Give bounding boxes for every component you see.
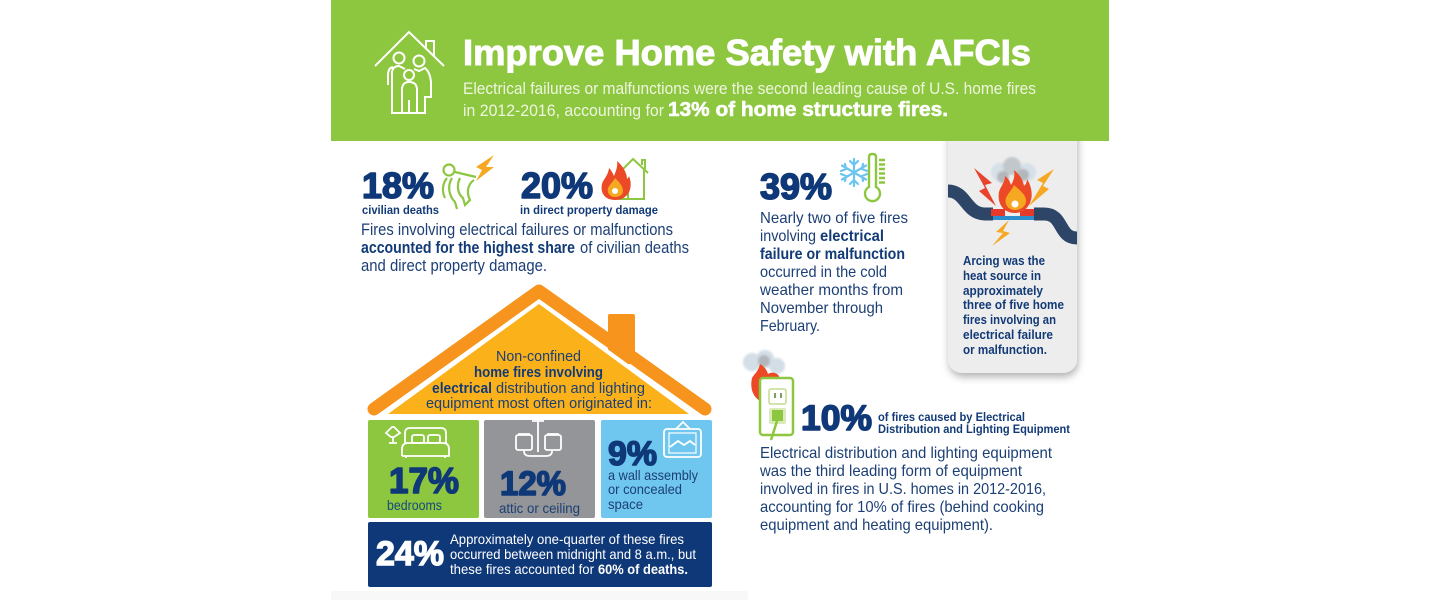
subtitle [463,79,1036,121]
title: Improve Home Safety with AFCIs [463,32,1031,73]
text: highest share paragraph: and direct property damage. [361,257,547,275]
room: wall assembly: space [608,496,643,512]
stat: 10% of fires: of fires caused by Electrical [878,410,1025,424]
roof text: electrical [432,381,492,397]
icon: burning outlet [743,350,793,440]
subtitle: in 2012-2016, accounting for [463,101,664,120]
stat: 20% property damage: 20% [521,165,593,206]
subtitle: Electrical failures or malfunctions were the second leading cause of U.S. home fires [463,79,1036,98]
text: cold weather paragraph [759,210,908,335]
illustration: arcing wire [948,157,1077,246]
text: cold weather paragraph: occurred in the cold [760,264,887,281]
roof text: home fires involving [474,365,603,381]
text: equipment paragraph: involved in fires in U.S. homes in 2012-2016, [760,481,1046,498]
roof text: equipment most often originated in: [426,396,652,412]
text: equipment paragraph: was the third leading form of equipment [759,463,1023,480]
room: bedrooms [368,420,479,518]
text: cold weather paragraph: failure or malfunction [760,246,905,263]
card text: heat source in [963,269,1041,283]
text: highest share paragraph: of civilian deaths [580,239,689,257]
panel: header banner [331,0,1109,141]
room: attic or ceiling [484,420,595,518]
stat: 20% property damage: in direct property damage [520,203,658,217]
room: wall assembly: or concealed [608,481,682,497]
room: wall assembly [601,420,712,518]
text: cold weather paragraph: Nearly two of five fires [760,210,908,227]
stat: 20% property damage [520,159,658,217]
icon: house on fire [602,159,648,200]
icon: bed and lamp [386,427,449,458]
stat: 10% of fires: Distribution and Lighting Equipment [878,422,1070,436]
icon: thermometer [865,154,885,201]
icon: snowflake [841,159,867,186]
panel: arcing card [948,120,1077,373]
room: wall assembly: 9% [608,435,657,473]
text: cold weather paragraph: involving [760,228,816,245]
subtitle: 13% of home structure fires. [668,99,948,121]
callout: 24% midnight to 8 a.m.: 24% [376,535,444,573]
room: bedrooms: bedrooms [387,497,442,513]
roof text: Non-confined [496,349,581,365]
text: cold weather paragraph: weather months from [759,282,903,299]
callout: 24% midnight to 8 a.m.: Approximately one-quarter of these fires [450,531,684,547]
stat: 10% of fires: 10% [801,399,872,438]
card text: or malfunction. [963,343,1047,357]
card text: three of five home [963,298,1064,312]
panel: house diagram [368,291,712,587]
text: highest share paragraph [361,221,689,275]
room: attic or ceiling: attic or ceiling [499,500,580,516]
icon: framed picture [664,422,701,457]
callout: 24% midnight to 8 a.m.: these fires accounted for [450,561,594,577]
stat: 39% cold weather: 39% [760,166,832,207]
card text: electrical failure [963,328,1053,342]
callout: 24% midnight to 8 a.m. [368,522,712,587]
callout: 24% midnight to 8 a.m.: 60% of deaths. [598,561,688,577]
card text: fires involving an [963,313,1056,327]
card text: Arcing was the [963,254,1045,268]
icon: electrocuted person [443,155,494,209]
roof text: distribution and lighting [496,381,645,397]
stat: 10% of fires [801,399,1070,438]
icon: family in house [375,32,444,113]
text: cold weather paragraph: electrical [820,228,884,245]
room: bedrooms: 17% [389,460,459,501]
text: equipment paragraph: equipment and heating equipment). [760,517,993,534]
card text [963,254,1064,357]
room: attic or ceiling: 12% [500,465,566,503]
footer strip [331,591,748,600]
callout: 24% midnight to 8 a.m.: occurred between midnight and 8 a.m., but [450,546,696,562]
stat: 39% cold weather [760,154,885,207]
text: equipment paragraph: accounting for 10% of fires (behind cooking [760,499,1044,516]
text: cold weather paragraph: February. [760,318,820,335]
house roof [374,291,705,416]
icon: chandelier [516,421,561,456]
text: equipment paragraph [759,445,1053,534]
text: highest share paragraph: accounted for the highest share [361,239,575,257]
text: equipment paragraph: Electrical distribution and lighting equipment [760,445,1053,462]
card text: approximately [963,284,1043,298]
stat: 18% civilian deaths: civilian deaths [362,203,439,217]
room: wall assembly: a wall assembly [608,467,698,483]
stat: 18% civilian deaths [362,155,494,217]
text: highest share paragraph: Fires involving electrical failures or malfunctions [361,221,673,239]
roof text [426,349,652,412]
stat: 18% civilian deaths: 18% [362,165,434,206]
text: cold weather paragraph: November through [760,300,883,317]
